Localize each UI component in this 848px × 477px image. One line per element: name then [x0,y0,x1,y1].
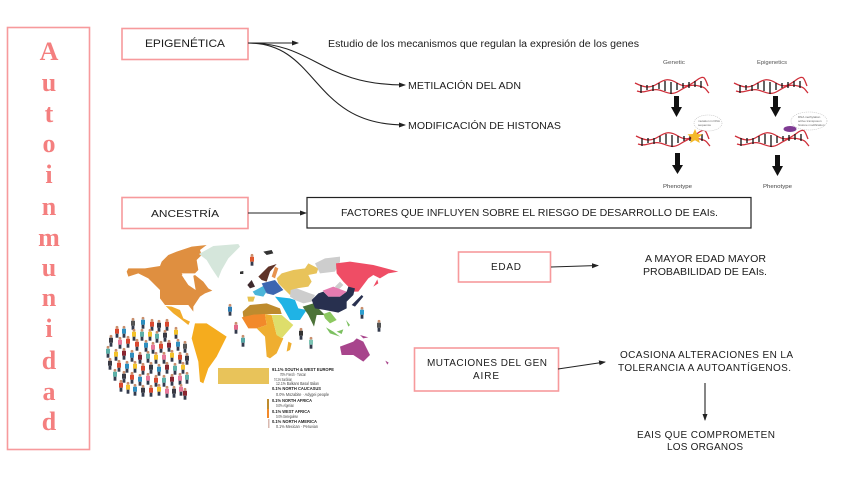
text: age effect: PROBABILIDAD DE EAIs. [643,267,767,278]
text: AIRE effect: TOLERANCIA A AUTOANTÍGENOS. [618,361,791,374]
map legend: 91.1% SOUTH & WEST EUROPE [272,367,334,372]
panel: Autoinmunidad vertical title: d [42,407,57,436]
panel: Autoinmunidad vertical title: i [45,160,53,189]
panel: Autoinmunidad vertical title: u [42,68,56,97]
box: factors influencing risk: FACTORES QUE INFLUYEN SOBRE EL RIESGO DE DESARROLLO DE EAIs. [341,208,718,219]
text: definition of epigenetics: Estudio de los mecanismos que regulan la expresión de los genes [328,39,639,50]
text: organ involvement: LOS ORGANOS [667,442,743,453]
panel: Autoinmunidad vertical title [8,28,90,450]
heading box: Mutaciones del gen AIRE [414,348,558,391]
box: factors influencing risk [307,198,751,228]
text: organ involvement [637,430,775,453]
text: AIRE effect: OCASIONA ALTERACIONES EN LA [620,350,793,361]
panel: Autoinmunidad vertical title: d [42,346,57,375]
panel: Autoinmunidad vertical title: n [42,192,57,221]
text: histone modification: MODIFICACIÓN DE HISTONAS [408,119,561,132]
heading box: Edad [458,252,550,282]
heading box: Ancestría [122,198,248,228]
diagram: DNA genetics versus epigenetics: Phenotype [763,184,792,190]
map legend: 0.0% Algerian [276,403,294,408]
panel: Autoinmunidad vertical title: n [42,283,57,312]
diagram: DNA genetics versus epigenetics [635,60,827,190]
people: crowd illustration [106,317,189,400]
diagram: DNA genetics versus epigenetics: active transposon [798,119,822,123]
heading box: Edad: EDAD [491,262,521,273]
diagram: DNA genetics versus epigenetics: Genetic [663,60,686,66]
panel: Autoinmunidad vertical title: a [42,377,56,406]
map legend: 0.1% NORTH CAUCASUS [272,386,321,391]
arrow: Edad to effect [551,266,598,267]
text: AIRE effect [618,350,793,374]
heading box: Epigenética [122,28,248,60]
text: age effect: A MAYOR EDAD MAYOR [645,254,766,265]
map legend: 74.1% Sardinian [274,377,292,382]
map legend: 0.1% NORTH AMERICA [272,419,317,424]
diagram: DNA genetics versus epigenetics: Phenotype [663,184,692,190]
panel: Autoinmunidad vertical title: u [42,253,56,282]
arrows: Epigenética branches [248,43,405,125]
map legend: 0.1% NORTH AFRICA [272,398,312,403]
people: figures around the map [228,254,381,349]
map legend: 12.1% Balkans Basal Italian [276,381,320,386]
text: organ involvement: EAIS QUE COMPROMETEN [637,430,775,441]
map legend: 0.1% WEST AFRICA [272,409,310,414]
map legend: 0.0% Senegalese [276,414,298,419]
panel: Autoinmunidad vertical title: m [38,223,60,252]
heading box: Epigenética: EPIGENÉTICA [145,37,226,50]
map legend: 70% French · Tuscan [280,372,306,377]
arrow: Ancestría to factors [248,212,306,214]
heading box: Mutaciones del gen AIRE: AIRE [473,371,499,382]
arrow: effect to organs [704,383,706,420]
world map: ancestry regions [127,244,398,383]
panel: Autoinmunidad vertical title: A [40,37,59,66]
map legend: 0.0% Mozabite · Adygei people [276,392,330,397]
diagram: DNA genetics versus epigenetics: histone modification [798,123,825,127]
diagram: DNA genetics versus epigenetics: DNA methylation [798,115,821,119]
text: DNA methylation: METILACIÓN DEL ADN [408,79,521,92]
panel: Autoinmunidad vertical title: o [42,129,56,158]
diagram: DNA genetics versus epigenetics: Epigenetics [757,60,788,66]
text: age effect [643,254,767,278]
heading box: Ancestría: ANCESTRÍA [151,207,219,220]
map legend: 0.1% Mexican · Peruvian [276,424,319,429]
heading box: Mutaciones del gen AIRE: MUTACIONES DEL GEN [427,358,547,369]
diagram: DNA genetics versus epigenetics: sequence [698,123,711,127]
diagram: DNA genetics versus epigenetics: mutation in DNA [698,119,720,123]
map legend [218,367,334,429]
arrow: Mutaciones to effect [558,362,605,369]
panel: Autoinmunidad vertical title: t [45,99,54,128]
panel: Autoinmunidad vertical title: i [45,314,53,343]
